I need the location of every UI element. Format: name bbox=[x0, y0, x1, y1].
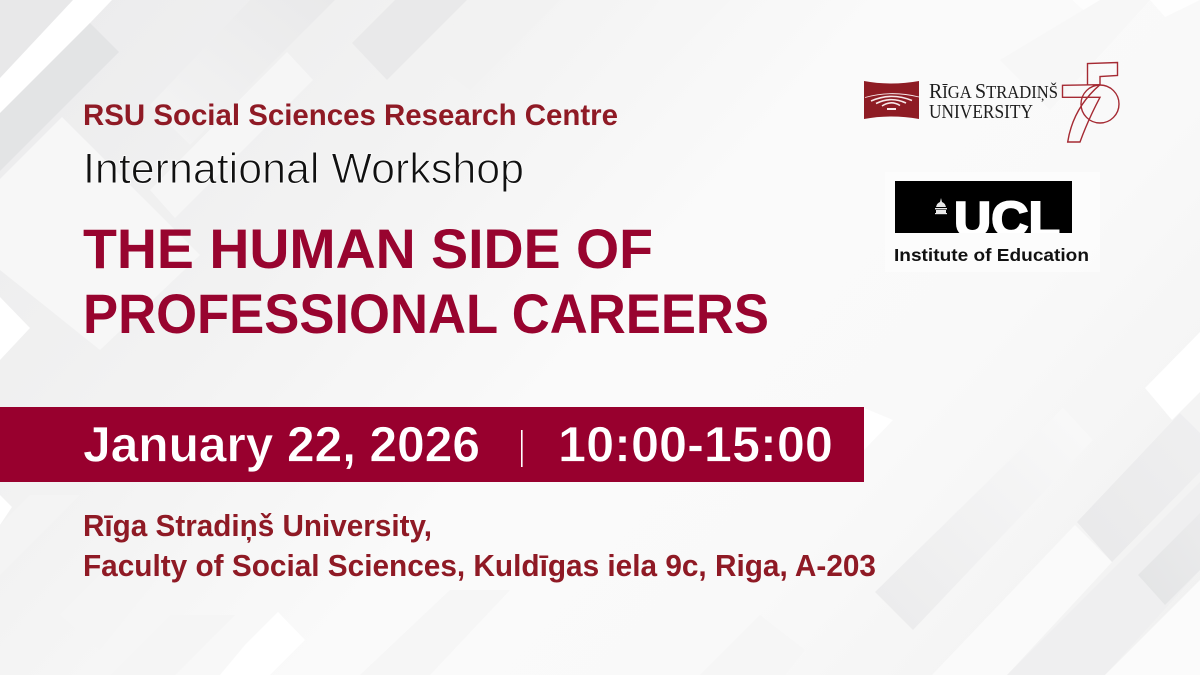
venue address: Faculty of Social Sciences, Kuldīgas iela 9c, Riga, A-203 bbox=[83, 548, 876, 583]
logo: Riga Stradins University: UNIVERSITY bbox=[929, 102, 1033, 123]
venue address: Rīga Stradiņš University, bbox=[83, 508, 432, 543]
title: PROFESSIONAL CAREERS bbox=[83, 282, 769, 345]
logo: Riga Stradins University bbox=[864, 62, 1119, 142]
icon: 75 anniversary mark bbox=[1062, 62, 1119, 142]
logo: Riga Stradins University: RĪGA STRADIŅŠ bbox=[929, 79, 1058, 103]
icon: auditorium emblem bbox=[864, 81, 919, 119]
date and time banner bbox=[0, 407, 864, 482]
date and time banner: 10:00-15:00 bbox=[558, 416, 833, 472]
logo: UCL Institute of Education: Institute of Education bbox=[894, 245, 1089, 265]
title: THE HUMAN SIDE OF bbox=[83, 217, 653, 280]
icon: UCL portico bbox=[935, 198, 947, 214]
date: January 22, 2026 bbox=[83, 416, 480, 472]
heading: event type: International Workshop bbox=[83, 145, 524, 193]
venue address bbox=[83, 508, 876, 583]
logo: UCL Institute of Education: UCL bbox=[954, 193, 1060, 247]
logo: UCL Institute of Education bbox=[895, 181, 1088, 261]
title bbox=[83, 217, 769, 345]
heading: organiser: RSU Social Sciences Research Centre bbox=[83, 99, 618, 132]
